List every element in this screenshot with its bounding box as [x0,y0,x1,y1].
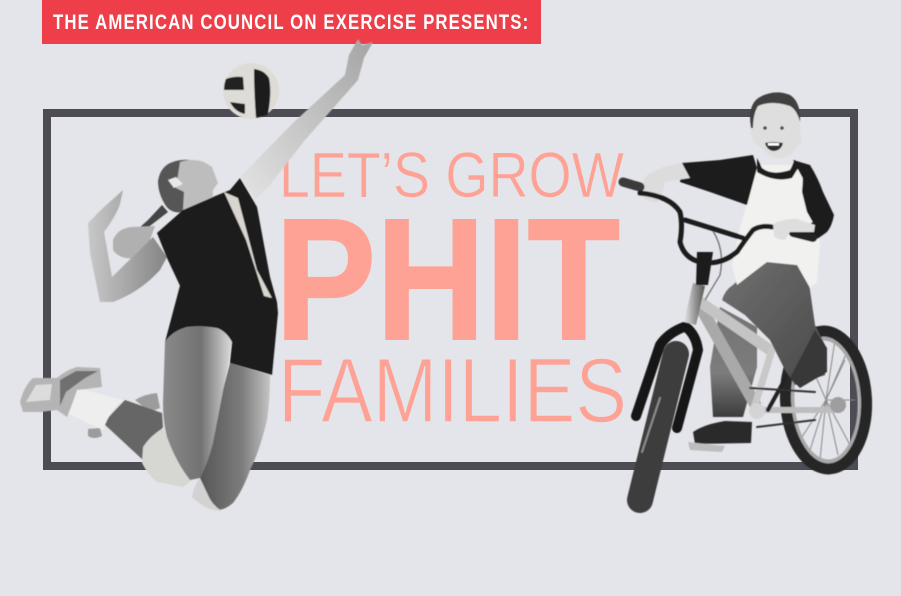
head and hair [158,160,218,212]
title frame [47,113,854,466]
raised arm [240,39,373,200]
forearm and left hand [640,163,690,202]
handlebars [623,182,813,263]
icon: volleyball [223,63,279,119]
rear wheel [782,329,870,471]
back leg [710,307,757,417]
lower knee pad [192,478,222,511]
front wheel [640,354,676,500]
brake cable [705,231,721,300]
left sleeve [680,155,757,205]
left arm [88,190,167,302]
ponytail [113,205,168,258]
jersey stripe [224,192,272,298]
upper knee pad [142,428,192,487]
title line: let's grow: LET’S GROW [279,139,625,211]
head [750,92,801,158]
back thigh [200,363,270,510]
jersey [157,178,277,325]
back shoe and pedal [688,421,752,452]
title line: phit: PHIT [275,182,620,376]
shin [103,400,163,460]
boy's front leg [722,262,827,388]
banner [42,0,541,44]
right hand [773,219,815,240]
right sleeve [793,160,834,242]
title line: families: FAMILIES [278,340,627,442]
title [275,139,627,442]
fork [636,327,698,428]
collar [757,158,800,180]
front thigh [163,326,232,480]
shoe [20,367,102,417]
boy on bicycle [623,92,870,500]
t-shirt [732,165,820,288]
back shoe [88,393,160,438]
banner: THE AMERICAN COUNCIL ON EXERCISE PRESENTS: [53,11,528,35]
bicycle frame [700,302,846,427]
sock [67,388,123,430]
volleyball player [20,39,373,511]
head tube and stem [684,283,705,325]
shorts [165,278,278,375]
